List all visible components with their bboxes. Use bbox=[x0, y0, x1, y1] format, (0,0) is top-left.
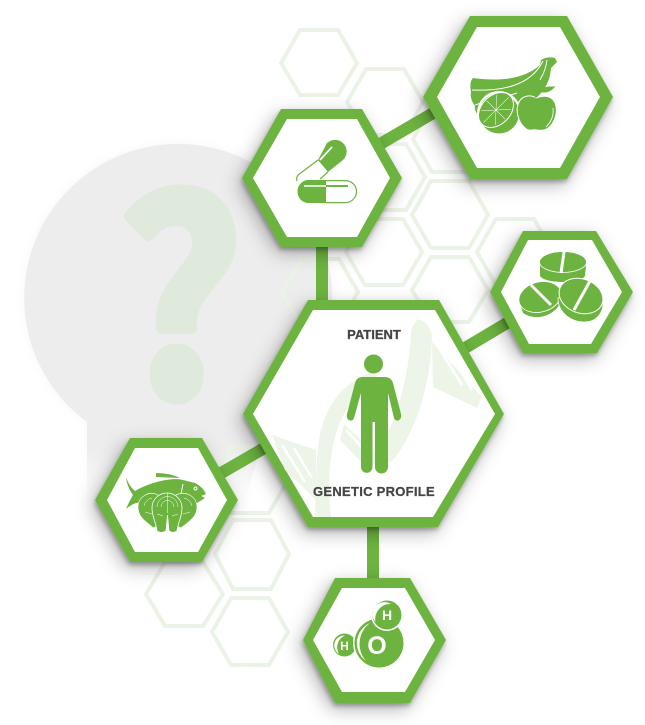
DNA helix watermark inside hexagon bbox=[272, 319, 482, 517]
molecule labels: O bbox=[367, 632, 387, 660]
heading: patient: PATIENT bbox=[347, 327, 401, 342]
panel: fruit hexagon bbox=[423, 16, 613, 179]
molecule labels bbox=[340, 607, 392, 660]
question mark: ? bbox=[117, 86, 244, 473]
molecule labels: H bbox=[340, 639, 349, 653]
panel: fish hexagon bbox=[95, 438, 238, 562]
icon: fish and salmon steaks bbox=[126, 473, 206, 532]
icon: capsules bbox=[297, 140, 356, 203]
panel: patient genetic profile hexagon bbox=[243, 300, 504, 527]
icon: fruit bbox=[470, 57, 557, 135]
panel: water hexagon bbox=[303, 578, 446, 703]
panel: tablets hexagon bbox=[490, 231, 633, 353]
panel: capsule hexagon bbox=[242, 109, 402, 247]
icon: tablets bbox=[515, 252, 608, 322]
connector: patient to water bbox=[367, 520, 379, 584]
icon: water molecule bbox=[333, 599, 405, 669]
connector: capsule to patient bbox=[316, 240, 328, 306]
faint hexagon pattern bbox=[146, 30, 553, 665]
heading: genetic profile: GENETIC PROFILE bbox=[313, 484, 435, 499]
lightbulb background with question mark bbox=[24, 86, 332, 500]
connector: patient to fish bbox=[216, 447, 266, 476]
molecule labels: H bbox=[382, 607, 392, 623]
connector: capsule to fruit bbox=[375, 109, 440, 147]
icon: person bbox=[347, 354, 401, 474]
connector: patient to tablets bbox=[460, 320, 512, 351]
